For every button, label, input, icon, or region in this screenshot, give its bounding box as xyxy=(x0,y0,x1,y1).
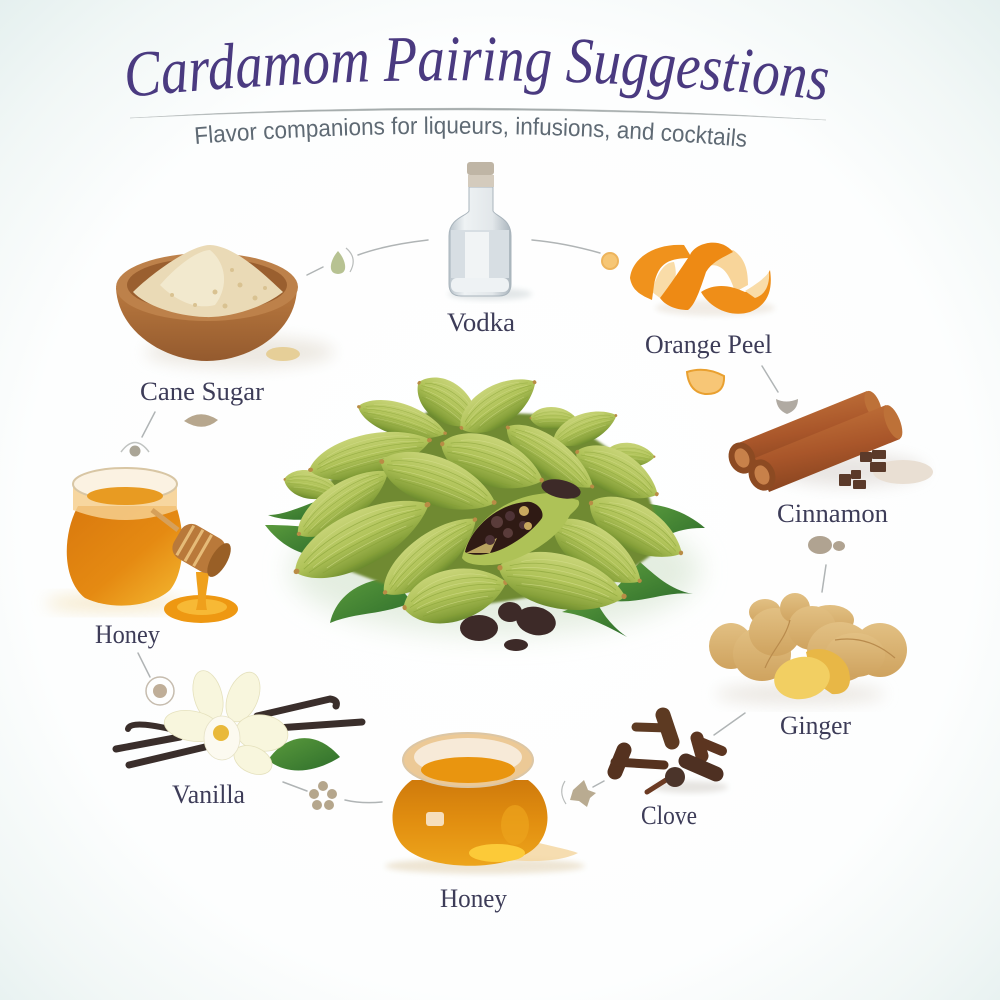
title divider xyxy=(130,108,826,120)
label: vanilla: Vanilla xyxy=(172,780,245,809)
vanilla beans and flower xyxy=(116,667,362,780)
orange peel xyxy=(630,243,775,316)
label: vodka: Vodka xyxy=(447,308,515,337)
cloves xyxy=(615,715,728,793)
loose seeds xyxy=(460,476,582,651)
title: Cardamom Pairing Suggestions xyxy=(127,37,828,100)
label: honey left: Honey xyxy=(95,620,160,649)
pile base xyxy=(320,410,665,605)
icon: tan leaf xyxy=(184,414,218,427)
label: honey bottom: Honey xyxy=(440,884,507,913)
icon: arc dot xyxy=(121,442,149,456)
wooden bowl with sugar xyxy=(116,245,335,368)
item: honey bottom xyxy=(385,733,585,913)
icon: swirl xyxy=(146,677,174,705)
item: honey left xyxy=(45,468,238,649)
honey jar with dipper xyxy=(45,468,238,623)
vodka bottle xyxy=(448,162,532,300)
label: cane sugar: Cane Sugar xyxy=(140,377,264,406)
label: ginger: Ginger xyxy=(780,711,851,740)
label: orange peel: Orange Peel xyxy=(645,330,772,359)
item: cinnamon xyxy=(724,388,933,528)
item: vanilla xyxy=(116,667,362,809)
label: cinnamon: Cinnamon xyxy=(777,499,888,528)
label: clove: Clove xyxy=(641,801,697,830)
item: vodka xyxy=(447,162,532,337)
icon: orange slice xyxy=(687,370,724,394)
icon: small orange xyxy=(602,253,618,269)
central cardamom pile xyxy=(265,364,705,651)
open pod with seeds xyxy=(462,493,579,565)
icon: heart xyxy=(776,399,798,414)
item: cane sugar xyxy=(116,245,335,406)
icon: star leaf xyxy=(562,780,596,807)
connector lines xyxy=(138,240,826,803)
icon: root xyxy=(808,536,845,554)
pods xyxy=(281,364,694,633)
icon: flower xyxy=(309,781,337,810)
subtitle: Flavor companions for liqueurs, infusions, and cocktails xyxy=(196,116,746,147)
item: orange peel xyxy=(630,243,775,359)
cinnamon sticks xyxy=(724,388,933,495)
leaves xyxy=(265,498,705,637)
item: clove xyxy=(615,715,728,830)
small honey jar xyxy=(385,733,585,874)
item: ginger xyxy=(709,593,907,740)
icon: sage drop xyxy=(331,248,353,274)
pile shadow xyxy=(290,505,700,635)
ginger root xyxy=(709,593,907,704)
